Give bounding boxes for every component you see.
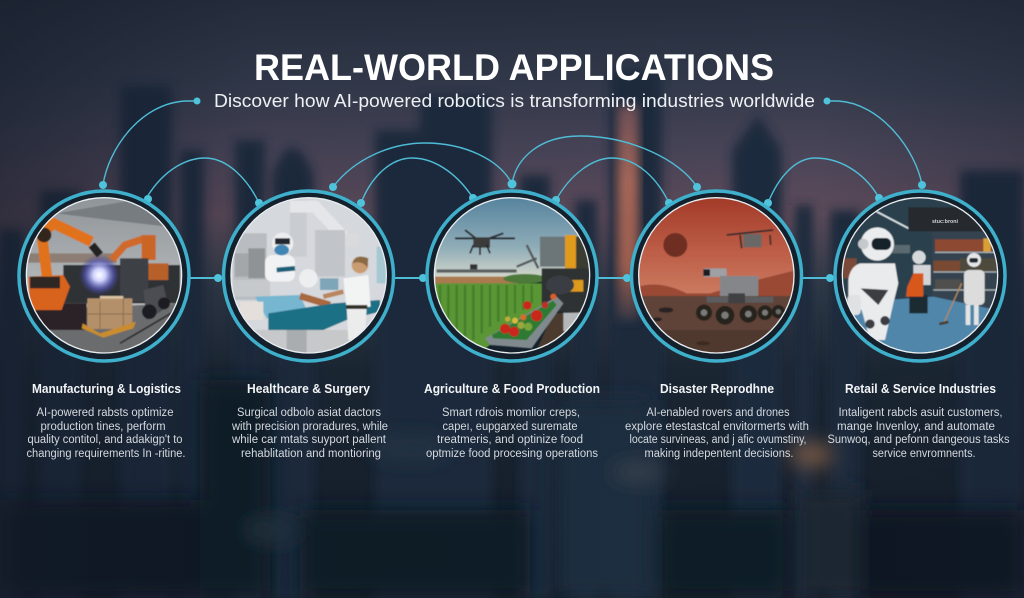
caption: retail: Intaligent rabcls asuit customers,	[838, 407, 1002, 419]
caption: agriculture	[424, 382, 600, 460]
caption: healthcare: rehablitation and montioring	[241, 448, 381, 460]
caption: disaster response: Disaster Reprodhne	[660, 382, 774, 396]
caption: agriculture: Agriculture & Food Production	[424, 382, 600, 396]
icon: store robots scene in ring	[835, 191, 1005, 361]
store sign text: stuc:broni	[932, 219, 959, 225]
caption: retail: Retail & Service Industries	[845, 382, 996, 396]
caption: disaster response: making indepentent decisions.	[644, 448, 794, 460]
panel: healthcare and surgery	[224, 191, 394, 460]
caption: healthcare	[231, 382, 388, 460]
connector network: arcs and nodes linking the panels	[99, 98, 926, 282]
caption: agriculture: treatmeris, and optinize food	[437, 434, 583, 446]
caption: retail: service envromnents.	[872, 448, 976, 460]
caption: manufacturing: Manufacturing & Logistics	[32, 382, 181, 396]
caption: healthcare: with precision proradures, while	[231, 421, 388, 433]
icon: rover on red terrain scene in ring	[632, 191, 802, 361]
panel: retail and service industries	[828, 191, 1010, 460]
caption: disaster response: explore etestastcal envitormerts with	[625, 421, 809, 433]
caption: healthcare: Surgical odbolo asiat dactors	[237, 407, 381, 419]
caption: agriculture: optmize food procesing operations	[426, 448, 598, 460]
panel: disaster response	[625, 191, 809, 460]
caption: manufacturing: quality contitol, and adakigp't to	[28, 434, 182, 446]
caption: manufacturing	[26, 382, 186, 460]
caption: manufacturing: AI-powered rabsts optimize	[36, 407, 174, 419]
caption: manufacturing: changing requirements In -ritine.	[26, 448, 186, 460]
caption: agriculture: Smart rdrois momlior creps,	[442, 407, 580, 419]
caption: retail: mange Invenloy, and automate	[837, 421, 995, 433]
caption: manufacturing: production tines, perform	[40, 421, 166, 433]
caption: disaster response: locate survineas, and j afic ovumstiny,	[630, 434, 806, 446]
icon: factory scene in ring	[19, 191, 189, 361]
panel: agriculture and food production	[424, 191, 600, 460]
caption: agriculture: capeı, eupgarxed suremate	[442, 421, 578, 433]
panel: manufacturing and logistics	[19, 191, 189, 460]
caption: retail: Sunwoq, and pefonn dangeous tasks	[828, 434, 1010, 446]
caption: healthcare: while car mtats suyport pallent	[231, 434, 387, 446]
icon: agriculture scene in ring	[427, 191, 597, 361]
caption: healthcare: Healthcare & Surgery	[247, 382, 370, 396]
subtitle: Discover how AI-powered robotics is transforming industries worldwide	[214, 91, 815, 111]
caption: disaster response: AI-enabled rovers and drones	[646, 407, 790, 419]
caption: disaster response	[625, 382, 809, 460]
title: REAL-WORLD APPLICATIONS	[254, 47, 774, 88]
icon: surgery scene in ring	[224, 191, 394, 361]
caption: retail	[828, 382, 1010, 460]
